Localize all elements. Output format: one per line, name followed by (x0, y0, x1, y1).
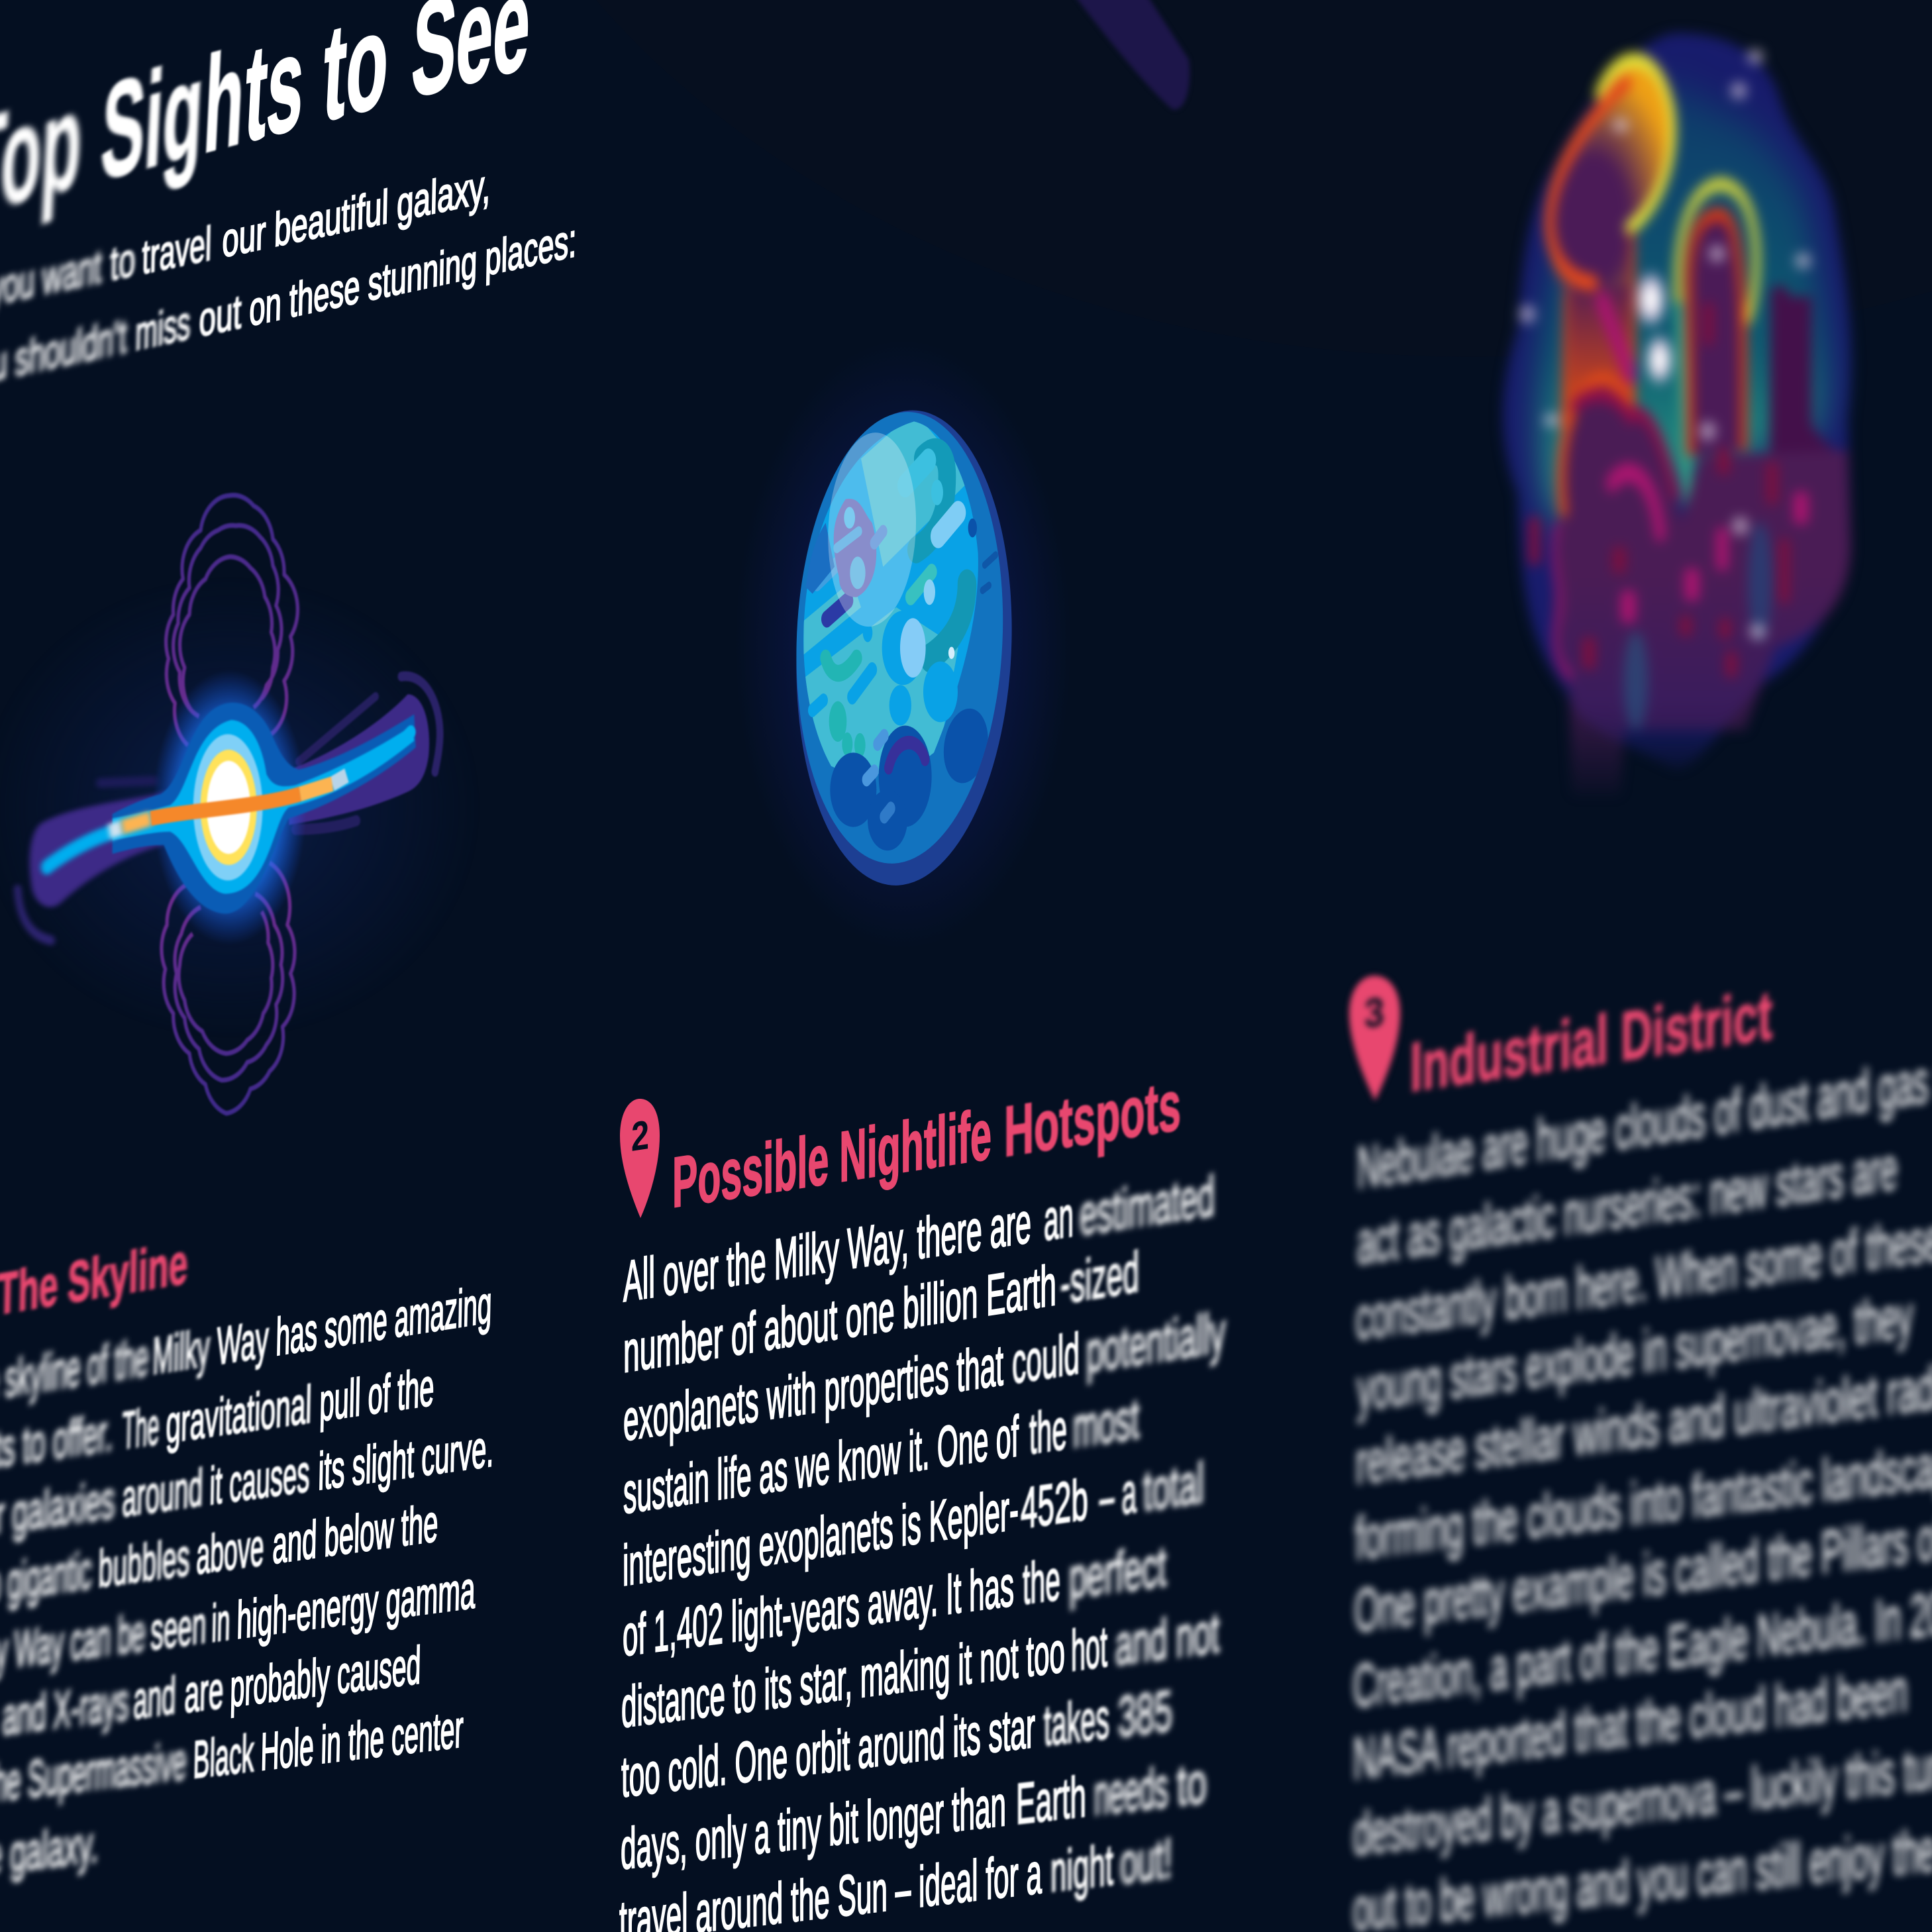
lower gas bubble (162, 863, 295, 1113)
heading: Top Sights to See: Sig (98, 31, 207, 209)
purple jet lobe left (30, 792, 167, 907)
icon: map pin 2 (620, 1099, 660, 1218)
body text: Possible Nightlife Hotspots (619, 1163, 1225, 1932)
body text: Possible Nightlife Hotspots: takes (1044, 1686, 1109, 1758)
body text: The Skyline: Black (193, 1723, 255, 1790)
faint background arc (596, 0, 1932, 357)
body text: The Skyline: Milky (152, 1318, 211, 1386)
body text: The Skyline: it causes (209, 1443, 310, 1516)
bright stars (1635, 269, 1674, 387)
intro text: to (110, 232, 136, 291)
body text: The Skyline: Hole in the center (260, 1699, 464, 1782)
body text: Possible Nightlife Hotspots: exoplanets with properties that (623, 1333, 1003, 1453)
body text: The Skyline: gravitational (166, 1375, 312, 1454)
body text: The Skyline: around (122, 1458, 203, 1529)
core rings (193, 734, 262, 880)
body text: The Skyline: in (211, 1592, 230, 1654)
body text: The Skyline: bubbles (98, 1527, 190, 1599)
purple jet lobe right (289, 694, 429, 825)
body text: The Skyline: high-energy gamma (236, 1560, 476, 1651)
body text: The Skyline: above (196, 1517, 264, 1586)
body text: Possible Nightlife Hotspots: total (1143, 1450, 1204, 1523)
body text: Possible Nightlife Hotspots: number of about one billion Earth (623, 1252, 1056, 1385)
equatorial line (109, 732, 411, 832)
panel: Industrial District (1349, 976, 1932, 1932)
panel: The Skyline (0, 1230, 494, 1892)
intro text (0, 159, 577, 398)
body text: Possible Nightlife Hotspots: too cold. One orbit around its star (621, 1695, 1035, 1809)
planet shadow rim (782, 394, 1027, 902)
left motion arcs (out of focus) (18, 781, 154, 941)
left jet (out of focus) (46, 833, 111, 867)
body text: Possible Nightlife Hotspots: night (1050, 1833, 1113, 1904)
body text: Industrial District (1353, 1037, 1932, 1932)
gaps and glowing windows (1528, 302, 1808, 731)
outer halo (0, 577, 480, 1038)
cloud outline (1554, 379, 1675, 676)
body text: Possible Nightlife Hotspots: potentially (1086, 1299, 1225, 1385)
illustration: nebula pillars (1503, 33, 1851, 796)
body text: Possible Nightlife Hotspots: the (1023, 1547, 1060, 1617)
teal nebula core (1539, 87, 1827, 522)
title block (0, 0, 577, 398)
body text: The Skyline: Way (217, 1309, 270, 1376)
planet glow (735, 340, 1071, 948)
core glow (152, 670, 307, 945)
icon: map pin 2: 2 (631, 1112, 649, 1160)
purple streak at top (1073, 0, 1190, 109)
heading: Possible Nightlife Hotspots: Possible Nightlife (672, 1095, 991, 1223)
body text: Possible Nightlife Hotspots: sustain life as we know it. One of (623, 1403, 1019, 1526)
intro text: our beautiful galaxy, (222, 159, 491, 268)
heading: Possible Nightlife Hotspots: Hot (1004, 1082, 1073, 1172)
motion arcs (295, 676, 440, 829)
panel: Possible Nightlife Hotspots (619, 1066, 1225, 1932)
body text: Possible Nightlife Hotspots: an (1044, 1184, 1074, 1252)
planet body (782, 396, 1017, 880)
body text: Possible Nightlife Hotspots: needs (1094, 1755, 1168, 1827)
blue nebula cloud (1503, 33, 1851, 769)
illustration: blue exoplanet (755, 376, 1051, 913)
heading: Possible Nightlife Hotspots: spots (1073, 1066, 1181, 1162)
body text: Possible Nightlife Hotspots: interesting exoplanets is Kepler- (623, 1477, 1019, 1598)
lower dust mass (1553, 384, 1851, 796)
illustration: galactic core with gas bubbles and jets (0, 495, 480, 1113)
surface details (795, 411, 997, 850)
body text: The Skyline: and below the (272, 1494, 438, 1575)
body text: The Skyline: its slight curve. (318, 1418, 494, 1501)
body text: Possible Nightlife Hotspots: the (1029, 1396, 1067, 1466)
intro text: out (199, 285, 242, 347)
body text: Possible Nightlife Hotspots: estimated (1080, 1163, 1215, 1248)
blue disk (113, 703, 416, 914)
body text: The Skyline (0, 1274, 494, 1892)
upper gas bubble (166, 495, 297, 745)
body text: Possible Nightlife Hotspots: out! (1120, 1826, 1172, 1896)
left pillar (1548, 60, 1673, 429)
body text: The Skyline: seen (150, 1595, 207, 1662)
body text: The Skyline: pull of the (319, 1357, 434, 1433)
body text: Possible Nightlife Hotspots: perfect (1069, 1533, 1166, 1611)
intro text: travel (142, 217, 212, 285)
heading: The Skyline: The Skyline (0, 1230, 189, 1327)
heading: Top Sights to See (0, 0, 534, 245)
body text: Possible Nightlife Hotspots: could (1012, 1321, 1080, 1396)
cyan disk (113, 720, 414, 894)
body text: Possible Nightlife Hotspots: -sized (1060, 1239, 1139, 1317)
body text: Possible Nightlife Hotspots: most (1073, 1386, 1139, 1460)
body text: Possible Nightlife Hotspots: days, only a tiny bit longer than (621, 1774, 1006, 1882)
icon: map pin 3 (1349, 976, 1400, 1101)
body text: Possible Nightlife Hotspots: Earth (1016, 1764, 1086, 1837)
body text: Possible Nightlife Hotspots: distance to its star, making it not too (621, 1619, 1065, 1740)
right pillar (1769, 285, 1848, 549)
body text: Possible Nightlife Hotspots: hot (1071, 1614, 1107, 1683)
body text: Possible Nightlife Hotspots: 452b (1021, 1467, 1088, 1541)
body text: Possible Nightlife Hotspots: 385 (1118, 1678, 1172, 1749)
body text: Possible Nightlife Hotspots: and not (1115, 1600, 1219, 1678)
heading: Top Sights to See: h (201, 20, 248, 182)
middle pillar (1678, 184, 1756, 516)
body text: The Skyline: and (133, 1666, 176, 1731)
intro text: on these stunning places: (249, 213, 577, 336)
icon: map pin 3: 3 (1364, 989, 1384, 1037)
body text: The Skyline: probably caused (230, 1635, 421, 1719)
stars (1519, 49, 1811, 640)
text: has some amazing (276, 1274, 492, 1367)
body text: Possible Nightlife Hotspots: to (1177, 1751, 1207, 1818)
body text: The Skyline: The (122, 1396, 160, 1461)
body text: Possible Nightlife Hotspots: of 1,402 light-years away. It has (623, 1553, 1014, 1668)
body text: The Skyline: are (184, 1660, 224, 1724)
body text: Possible Nightlife Hotspots: – a (1099, 1460, 1137, 1530)
intro text: miss (135, 296, 191, 361)
body text: Possible Nightlife Hotspots: All over the Milky Way, there are (623, 1190, 1031, 1314)
